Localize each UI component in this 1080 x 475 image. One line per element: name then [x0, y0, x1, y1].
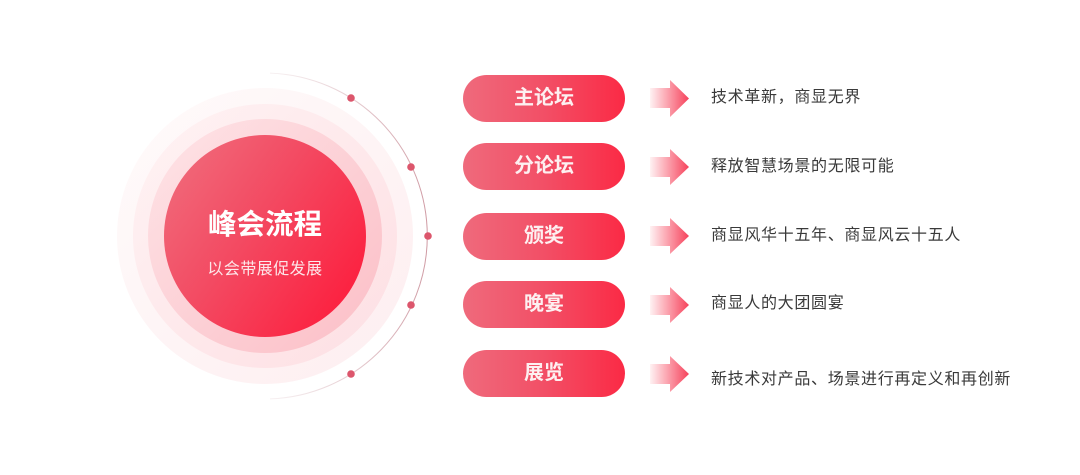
pill: 主论坛: 主论坛 — [514, 87, 574, 109]
subtitle: 以会带展促发展 — [207, 260, 323, 278]
title: 峰会流程 — [208, 209, 322, 241]
pill: 展览 — [463, 350, 625, 396]
description 2: 释放智慧场景的无限可能 — [711, 158, 894, 175]
arrow 4 — [650, 287, 689, 323]
arrow 5 — [650, 356, 689, 392]
arrow 1 — [650, 80, 689, 117]
description 3: 商显风华十五年、商显风云十五人 — [711, 226, 961, 244]
pill: 颁奖: 颁奖 — [524, 224, 564, 246]
outer rings — [117, 88, 413, 384]
arc with dots — [270, 73, 432, 399]
pill: 展览: 展览 — [524, 362, 564, 384]
arrow 3 — [650, 218, 689, 254]
pill: 颁奖 — [463, 212, 625, 260]
pill: 晚宴: 晚宴 — [524, 293, 564, 315]
description 1: 技术革新，商显无界 — [711, 89, 861, 106]
arrow 2 — [650, 149, 689, 185]
description 4: 商显人的大团圆宴 — [711, 295, 844, 312]
pill: 晚宴 — [463, 281, 625, 328]
central circle — [164, 135, 366, 337]
pill: 分论坛 — [463, 143, 625, 190]
description 5: 新技术对产品、场景进行再定义和再创新 — [711, 371, 1011, 388]
pill: 主论坛 — [463, 75, 625, 122]
pill: 分论坛: 分论坛 — [514, 155, 574, 177]
